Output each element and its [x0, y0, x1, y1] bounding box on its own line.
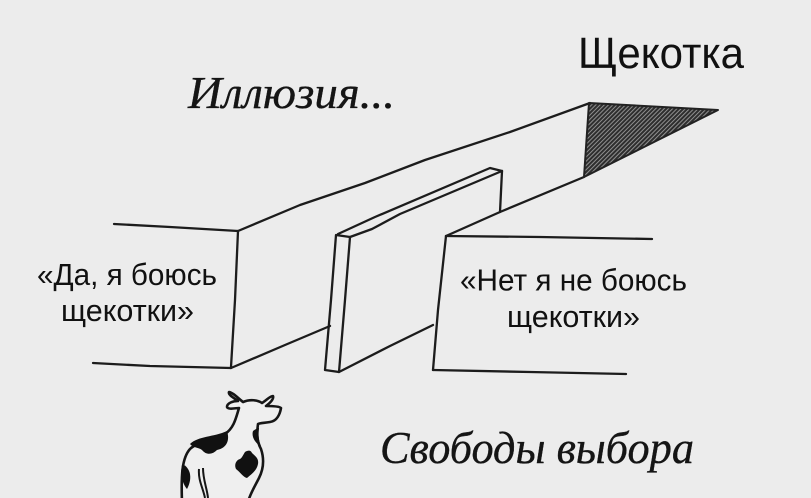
long corridor wall line [238, 103, 590, 231]
heading: illusion: Иллюзия... [187, 67, 395, 118]
title: tickling: Щекотка [578, 29, 745, 78]
icon: cow seen from behind [181, 392, 281, 498]
right wall [433, 177, 652, 374]
right door label: no, I am not ticklish [460, 262, 687, 334]
left door label: yes, I am ticklish: «Да, я боюсь [37, 257, 217, 292]
right door label: no, I am not ticklish: «Нет я не боюсь [460, 262, 687, 298]
shaded triangle: tickling end of corridor [584, 103, 718, 177]
cow leg lines [199, 468, 208, 498]
left door label: yes, I am ticklish: щекотки» [61, 293, 194, 328]
caption: freedom of choice: Свободы выбора [380, 423, 694, 473]
central door panel [325, 168, 502, 372]
right door label: no, I am not ticklish: щекотки» [507, 299, 640, 334]
cow spots [181, 428, 261, 489]
left door label: yes, I am ticklish [37, 257, 217, 328]
left wall [93, 224, 330, 368]
